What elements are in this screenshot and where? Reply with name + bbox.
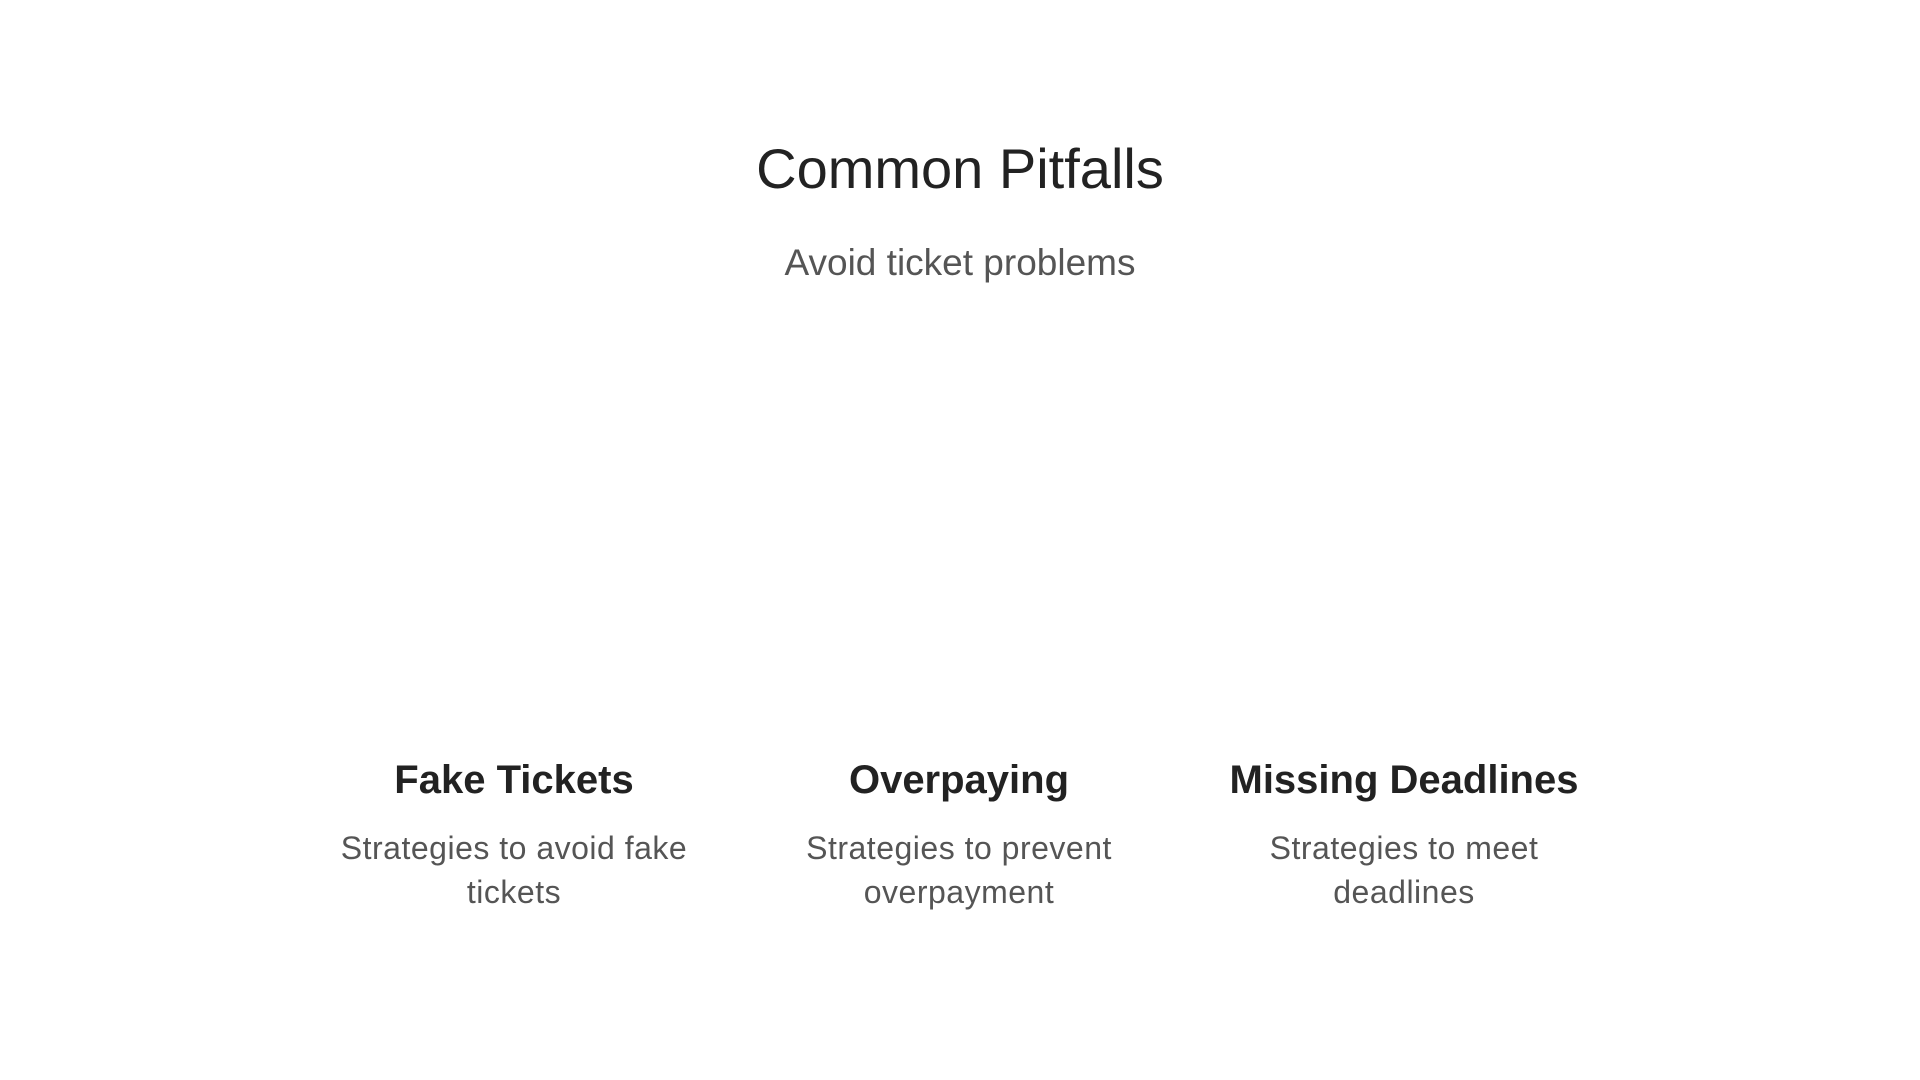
text: missing deadlines description: deadlines: [1333, 874, 1475, 910]
text: overpaying description: overpayment: [864, 874, 1054, 910]
text: overpaying description: Strategies to prevent: [806, 830, 1112, 866]
heading: overpaying: Overpaying: [849, 758, 1069, 802]
heading: fake tickets: Fake Tickets: [394, 758, 634, 802]
subtitle: Avoid ticket problems: [784, 242, 1135, 283]
title: Common Pitfalls: [756, 137, 1164, 200]
panel: missing deadlines: [1230, 758, 1578, 910]
text: missing deadlines description: Strategies to meet: [1270, 830, 1538, 866]
text: fake tickets description: [341, 830, 687, 910]
text: fake tickets description: tickets: [467, 874, 561, 910]
panel: overpaying: [806, 758, 1112, 910]
text: missing deadlines description: [1270, 830, 1538, 910]
panel: fake tickets: [341, 758, 687, 910]
text: overpaying description: [806, 830, 1112, 910]
text: fake tickets description: Strategies to avoid fake: [341, 830, 687, 866]
heading: missing deadlines: Missing Deadlines: [1230, 758, 1578, 802]
